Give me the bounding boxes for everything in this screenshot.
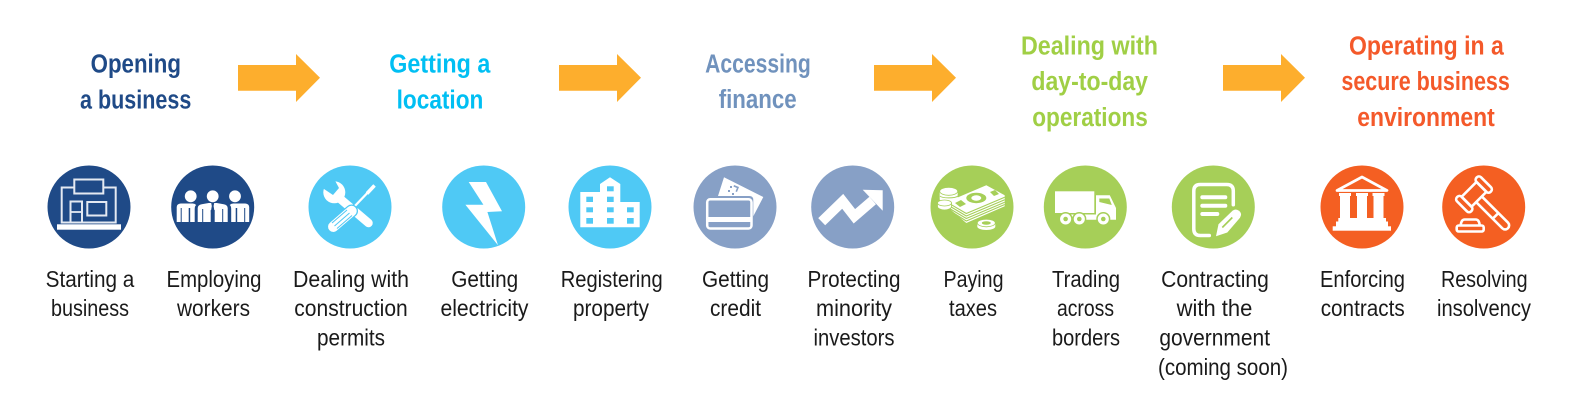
- arrow 3: [874, 54, 956, 102]
- label: Contracting with the government (coming soon): (coming soon): [1158, 354, 1288, 380]
- arrow 2: [559, 54, 641, 102]
- label: Starting a business: Starting a: [46, 266, 135, 292]
- icon: protecting minority investors: [811, 166, 894, 248]
- label: Starting a business: business: [51, 295, 129, 321]
- heading: Operating in a secure business environment: Operating in a: [1349, 32, 1505, 60]
- heading: Opening a business: a business: [80, 87, 191, 115]
- label: Enforcing contracts: Enforcing: [1320, 266, 1405, 292]
- label: Getting credit: [702, 266, 769, 321]
- heading: Dealing with day-to-day operations: operations: [1032, 104, 1148, 132]
- label: Protecting minority investors: minority: [816, 295, 892, 321]
- icon: paying taxes: [930, 166, 1014, 248]
- label: Protecting minority investors: [808, 266, 900, 350]
- heading: Getting a location: Getting a: [389, 51, 491, 79]
- label: Dealing with construction permits: [293, 266, 409, 350]
- label: Starting a business: [46, 266, 135, 321]
- label: Getting electricity: Getting: [451, 266, 518, 292]
- label: Employing workers: workers: [176, 295, 250, 321]
- label: Trading across borders: across: [1057, 295, 1114, 321]
- label: Contracting with the government (coming soon): [1158, 266, 1288, 380]
- label: Paying taxes: Paying: [944, 266, 1004, 292]
- icon: getting credit: [694, 166, 776, 248]
- label: Protecting minority investors: Protecting: [808, 266, 900, 292]
- heading: Accessing finance: Accessing: [705, 51, 811, 79]
- label: Resolving insolvency: [1437, 266, 1531, 321]
- label: Getting credit: credit: [710, 295, 762, 321]
- label: Contracting with the government (coming soon): with the: [1176, 295, 1252, 321]
- heading: Dealing with day-to-day operations: Dealing with: [1021, 32, 1158, 60]
- icon: resolving insolvency: [1442, 166, 1525, 248]
- label: Getting electricity: electricity: [440, 295, 529, 321]
- label: Registering property: [561, 266, 663, 321]
- label: Resolving insolvency: insolvency: [1437, 295, 1531, 321]
- heading: Operating in a secure business environment: environment: [1357, 104, 1495, 132]
- heading: Operating in a secure business environment: secure business: [1341, 68, 1510, 96]
- label: Trading across borders: borders: [1052, 324, 1120, 350]
- icon: contracting with the government: [1172, 166, 1255, 248]
- label: Contracting with the government (coming soon): Contracting: [1161, 266, 1269, 292]
- arrow 4: [1223, 54, 1305, 102]
- icon: dealing with construction permits: [308, 166, 392, 248]
- label: Getting electricity: [440, 266, 529, 321]
- label: Registering property: property: [573, 295, 649, 321]
- label: Paying taxes: taxes: [949, 295, 997, 321]
- heading: Opening a business: [80, 51, 191, 115]
- heading: Dealing with day-to-day operations: [1021, 32, 1158, 132]
- label: Dealing with construction permits: Dealing with: [293, 266, 409, 292]
- icon: employing workers: [171, 166, 254, 248]
- heading: Dealing with day-to-day operations: day-to-day: [1031, 68, 1149, 96]
- label: Dealing with construction permits: construction: [294, 295, 408, 321]
- label: Employing workers: [166, 266, 262, 321]
- heading: Getting a location: [389, 51, 491, 115]
- label: Getting credit: Getting: [702, 266, 769, 292]
- icon: registering property: [568, 166, 652, 248]
- label: Protecting minority investors: investors: [814, 324, 894, 350]
- heading: Operating in a secure business environment: [1341, 32, 1510, 132]
- heading: Accessing finance: [705, 51, 811, 114]
- label: Enforcing contracts: contracts: [1321, 295, 1405, 321]
- icon: enforcing contracts: [1320, 166, 1404, 248]
- icon: starting a business: [48, 166, 130, 248]
- label: Trading across borders: [1052, 266, 1120, 350]
- label: Contracting with the government (coming soon): government: [1159, 324, 1271, 350]
- icon: trading across borders: [1044, 166, 1127, 248]
- heading: Accessing finance: finance: [719, 86, 797, 114]
- icon: getting electricity: [442, 166, 525, 248]
- arrow 1: [238, 54, 320, 102]
- heading: Opening a business: Opening: [91, 51, 181, 79]
- label: Resolving insolvency: Resolving: [1441, 266, 1528, 292]
- label: Registering property: Registering: [561, 266, 663, 292]
- label: Paying taxes: [944, 266, 1004, 321]
- label: Enforcing contracts: [1320, 266, 1405, 321]
- label: Trading across borders: Trading: [1052, 266, 1120, 292]
- heading: Getting a location: location: [397, 87, 483, 115]
- label: Dealing with construction permits: permits: [317, 324, 385, 350]
- label: Employing workers: Employing: [166, 266, 262, 292]
